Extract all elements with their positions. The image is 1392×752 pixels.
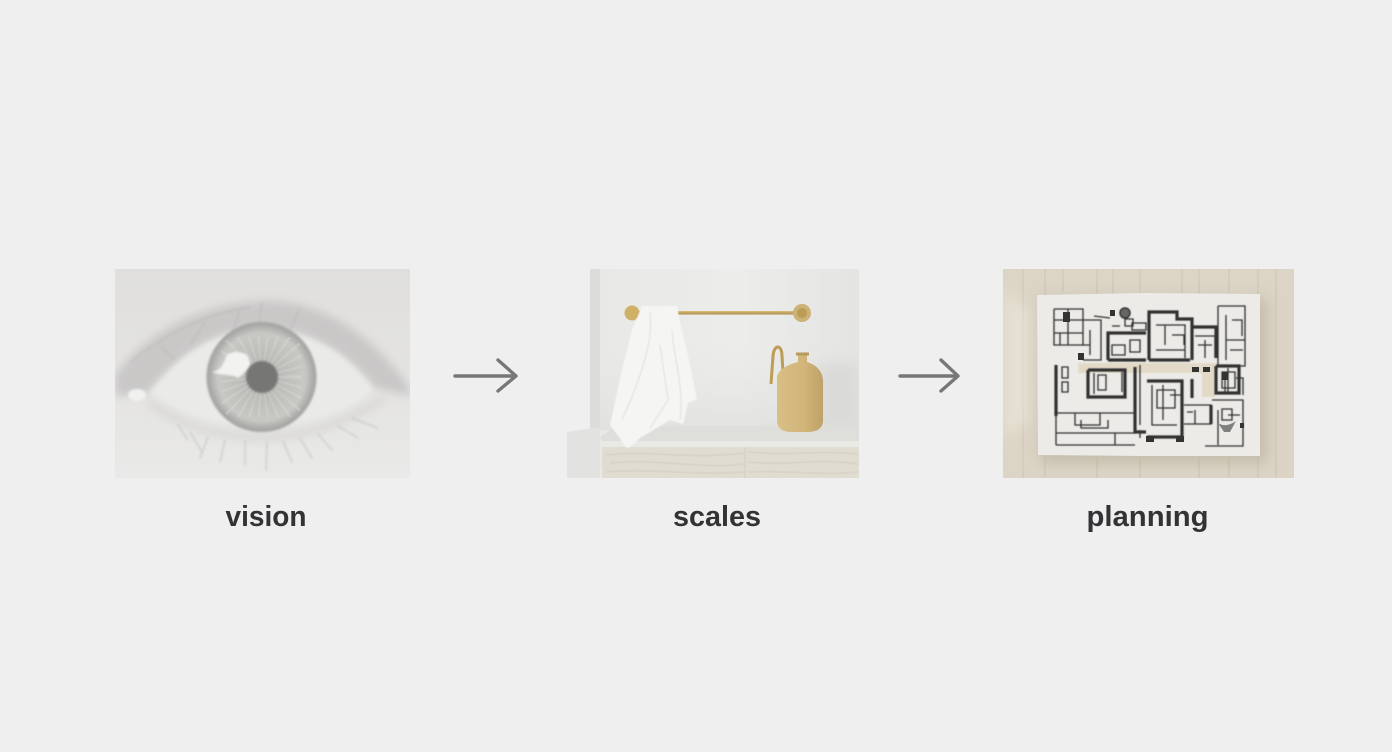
floor plan walls — [1054, 306, 1245, 446]
icon: pupil — [246, 361, 278, 393]
panel: scales shelf photo — [567, 269, 859, 478]
infographic: vision to scales to planning flow — [115, 269, 1294, 532]
icon: eyelid crease lines — [130, 302, 300, 362]
faucet — [771, 347, 783, 384]
paper — [1037, 293, 1260, 456]
icon: iris fibres — [228, 344, 294, 410]
icon: tear duct — [128, 389, 146, 401]
hatch — [1218, 421, 1236, 432]
arrow: scales to planning — [900, 360, 958, 391]
heading: scales: scales — [673, 501, 761, 533]
shelf top — [600, 430, 842, 441]
jar shadow — [822, 365, 854, 414]
heading: vision: vision — [226, 501, 306, 533]
arrow: vision to scales — [455, 360, 516, 391]
icon: upper eyelid — [115, 301, 410, 396]
heading: planning: planning — [1086, 501, 1208, 533]
panel: planning floor plan photo — [1003, 269, 1294, 478]
icon: iris — [206, 322, 316, 432]
towel — [610, 306, 697, 448]
round table — [1120, 308, 1130, 318]
towel rail — [624, 304, 811, 322]
side ledge — [567, 428, 590, 478]
jar — [777, 355, 823, 432]
paper shadow — [1040, 298, 1268, 464]
panel: vision eye photo — [115, 269, 410, 478]
shelf wood front — [602, 447, 859, 478]
icon: eye white — [152, 335, 370, 392]
icon: lashes — [178, 418, 378, 470]
icon: lower lid shadow — [154, 403, 377, 440]
dark details — [1063, 310, 1244, 442]
wood planks — [1023, 269, 1276, 478]
light patch — [1006, 302, 1028, 428]
icon: highlight — [212, 352, 250, 378]
plan corridor tan — [1078, 363, 1215, 397]
wall edge — [590, 269, 600, 439]
